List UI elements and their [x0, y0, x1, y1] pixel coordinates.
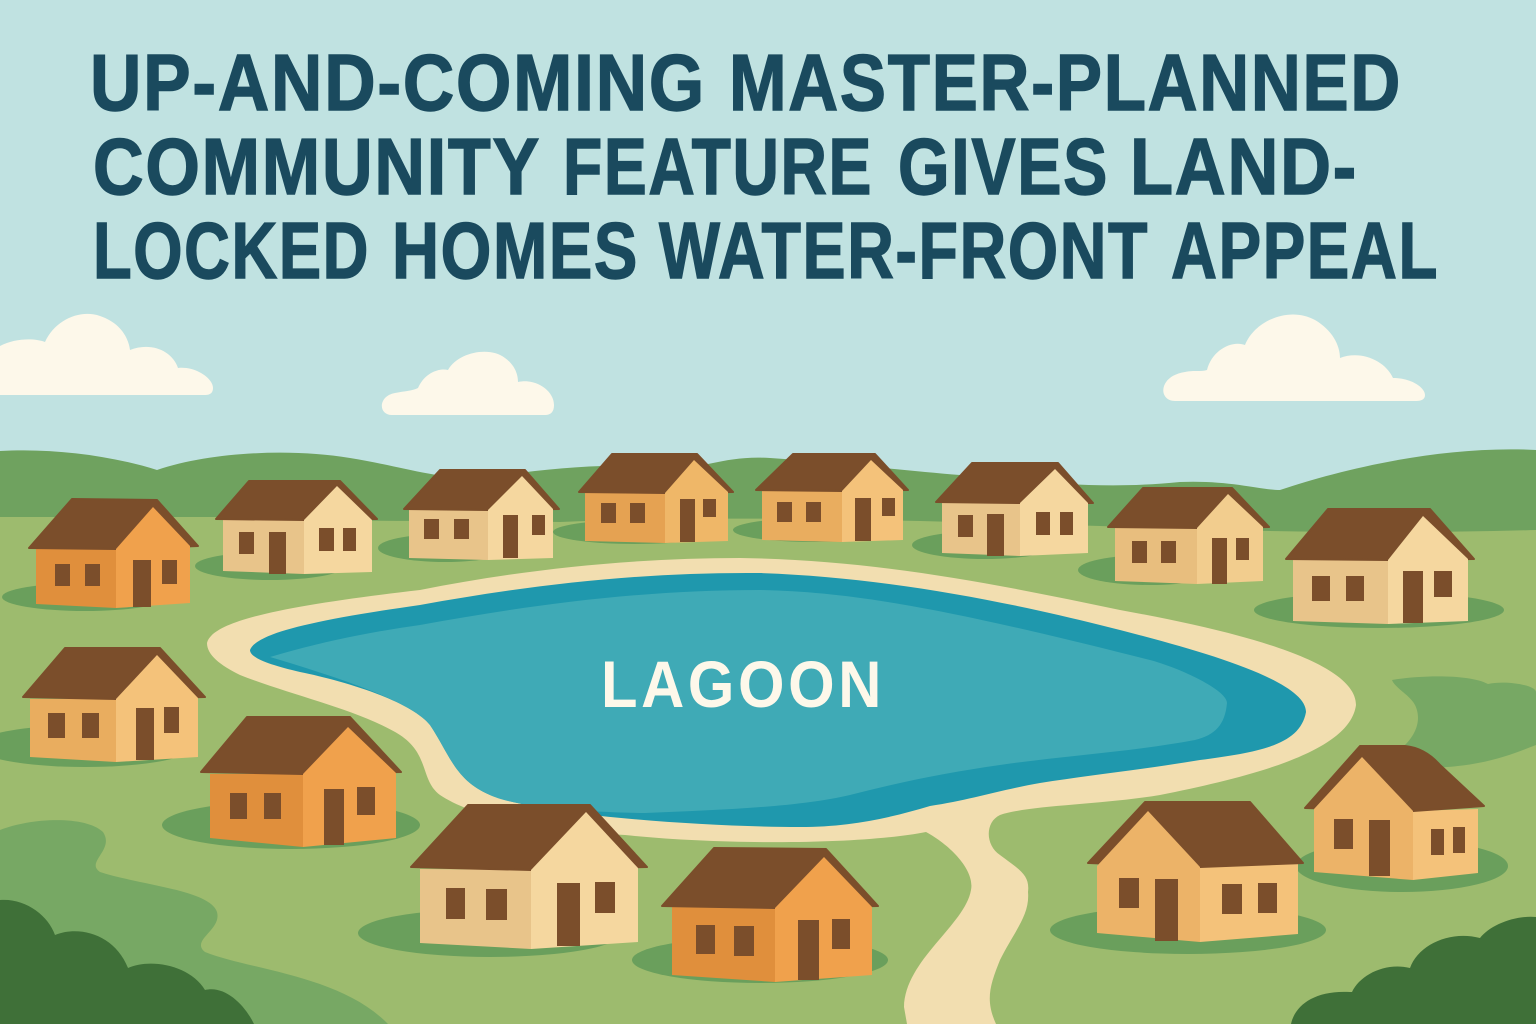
title: COMMUNITY	[93, 122, 541, 211]
cloud left	[0, 314, 213, 395]
house 3	[404, 470, 559, 560]
title	[90, 38, 1439, 295]
house 10	[201, 717, 401, 847]
house shadows	[0, 518, 1508, 983]
grass patch right	[1392, 676, 1536, 768]
cloud middle	[382, 352, 554, 415]
bush bottom right	[1291, 917, 1536, 1024]
house 12	[662, 848, 878, 982]
title: WATER-FRONT	[659, 206, 1149, 295]
title: MASTER-PLANNED	[729, 38, 1402, 127]
house 1	[29, 499, 198, 608]
title: UP-AND-COMING	[90, 38, 706, 127]
title: HOMES	[392, 206, 639, 295]
house 13	[1088, 802, 1303, 942]
house 9	[23, 648, 205, 762]
lagoon	[250, 573, 1306, 827]
cloud right	[1163, 314, 1425, 401]
lagoon shallow water	[270, 590, 1227, 813]
title: GIVES	[898, 122, 1109, 211]
ground	[0, 517, 1536, 1024]
house 2	[216, 481, 377, 574]
bush bottom left	[0, 900, 254, 1024]
title: LAND-	[1130, 122, 1358, 211]
grass patch bottom left	[0, 820, 388, 1024]
label: lagoon: LAGOON	[601, 647, 885, 721]
distant hills	[0, 449, 1536, 600]
house 14	[1305, 746, 1484, 880]
title: APPEAL	[1171, 206, 1439, 295]
house 4	[579, 454, 733, 543]
house 11	[411, 805, 647, 949]
house 8	[1286, 509, 1474, 624]
house 5	[756, 454, 908, 542]
sand path around lagoon	[207, 558, 1356, 1024]
lagoon deep water	[250, 573, 1306, 827]
house 6	[936, 463, 1093, 556]
title: FEATURE	[563, 122, 873, 211]
title: LOCKED	[93, 206, 370, 295]
house 7	[1108, 488, 1269, 584]
